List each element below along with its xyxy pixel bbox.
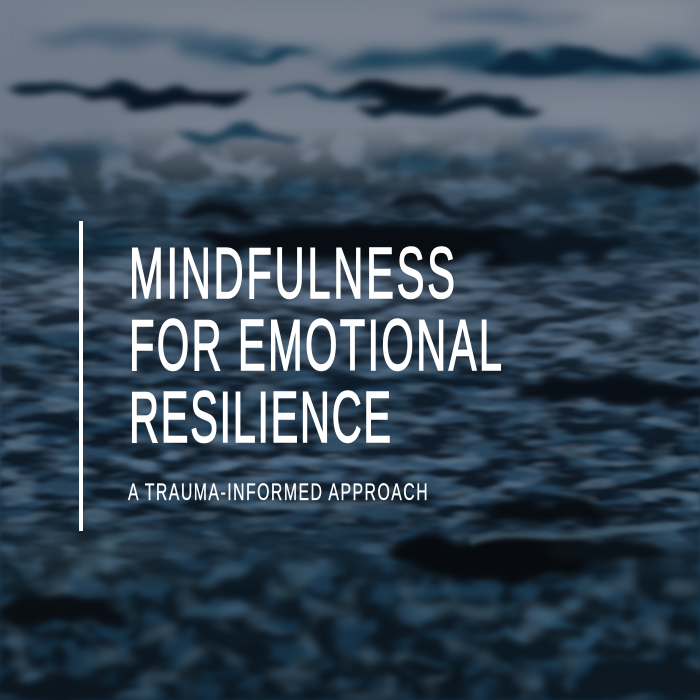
light ripple crest (470, 522, 700, 542)
subtitle: A TRAUMA-INFORMED APPROACH (128, 480, 428, 506)
title line 3: RESILIENCE (129, 378, 391, 458)
title line 2: FOR EMOTIONAL (129, 306, 502, 386)
vertical accent rule (79, 221, 83, 531)
title line 1: MINDFULNESS (129, 234, 455, 314)
